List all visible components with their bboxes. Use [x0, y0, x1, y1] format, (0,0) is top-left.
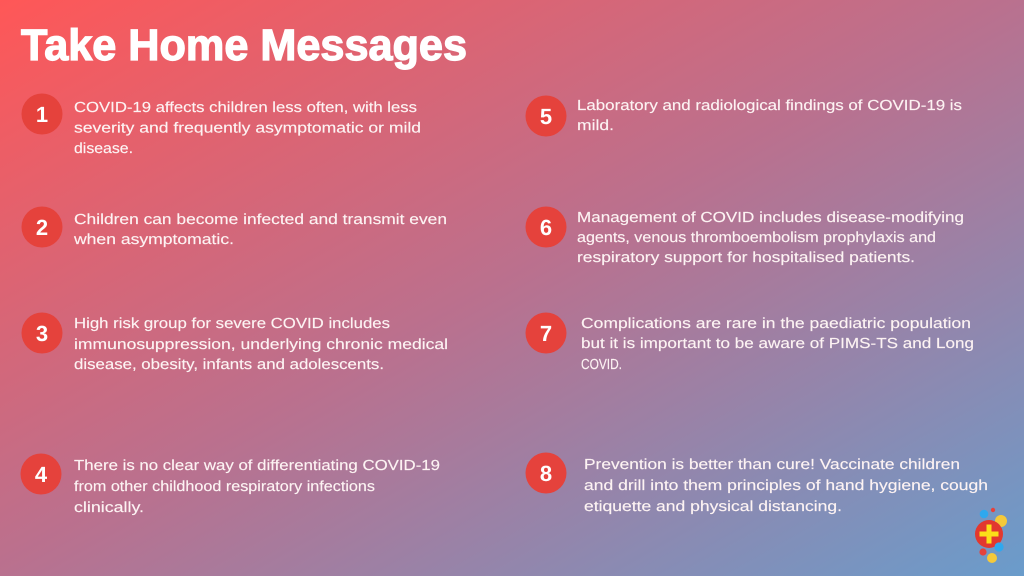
message 1 text: disease.: [74, 141, 133, 157]
number badge 7: 7: [540, 321, 552, 346]
number badge 7: [526, 312, 566, 354]
number badge 6: [526, 206, 566, 248]
message 7 text: COVID.: [581, 357, 622, 373]
message 5 text: mild.: [577, 118, 614, 134]
message 6 text: agents, venous thromboembolism prophylaxis and: [577, 230, 936, 246]
number badge 2: 2: [36, 215, 48, 240]
number badge 3: 3: [36, 321, 48, 346]
message 2 text: Children can become infected and transmit even: [74, 212, 447, 228]
message 8 text: and drill into them principles of hand hygiene, cough: [584, 478, 988, 494]
message 2: [22, 206, 447, 248]
message 7: [526, 312, 974, 373]
number badge 2: [22, 206, 62, 248]
message 4 text: clinically.: [74, 500, 144, 516]
number badge 3: [22, 312, 62, 354]
number badge 1: [22, 94, 62, 134]
message 3: [22, 312, 448, 373]
message 8: [526, 452, 988, 515]
message 8 text: etiquette and physical distancing.: [584, 499, 842, 515]
message 8 text: Prevention is better than cure! Vaccinate children: [584, 457, 960, 473]
message 3 text: [74, 316, 448, 373]
number badge 4: 4: [35, 462, 48, 487]
number badge 1: 1: [36, 102, 48, 127]
message 3 text: immunosuppression, underlying chronic medical: [74, 337, 448, 353]
message 1: [22, 94, 421, 157]
number badge 5: [526, 96, 566, 136]
message 6 text: [577, 210, 964, 266]
message 5 text: [577, 98, 962, 134]
message 7 text: [581, 316, 974, 373]
icon: medical cross with bubbles: [975, 508, 1007, 563]
message 4 text: There is no clear way of differentiating COVID-19: [74, 458, 440, 474]
message 8 text: [584, 457, 988, 515]
message 4 text: from other childhood respiratory infections: [74, 479, 375, 495]
message 4: [20, 454, 440, 516]
number badge 6: 6: [540, 215, 552, 240]
message 6 text: Management of COVID includes disease-modifying: [577, 210, 964, 226]
number badge 8: [526, 452, 566, 494]
message 6 text: respiratory support for hospitalised patients.: [577, 250, 915, 266]
message 1 text: COVID-19 affects children less often, with less: [74, 100, 417, 116]
number badge 4: [20, 454, 62, 494]
title: Take Home Messages: [21, 21, 467, 70]
message 5 text: Laboratory and radiological findings of COVID-19 is: [577, 98, 962, 114]
message 3 text: disease, obesity, infants and adolescents.: [74, 357, 384, 373]
message 6: [526, 206, 964, 266]
message 7 text: but it is important to be aware of PIMS-TS and Long: [581, 336, 974, 352]
message 5: [526, 96, 962, 136]
number badge 5: 5: [540, 104, 552, 129]
message 2 text: [73, 212, 447, 248]
number badge 8: 8: [540, 461, 552, 486]
message 7 text: Complications are rare in the paediatric population: [581, 316, 971, 332]
message 3 text: High risk group for severe COVID includes: [74, 316, 390, 332]
message 4 text: [74, 458, 440, 516]
message 1 text: severity and frequently asymptomatic or mild: [74, 120, 421, 136]
message 1 text: [74, 100, 421, 157]
message 2 text: when asymptomatic.: [73, 232, 234, 248]
